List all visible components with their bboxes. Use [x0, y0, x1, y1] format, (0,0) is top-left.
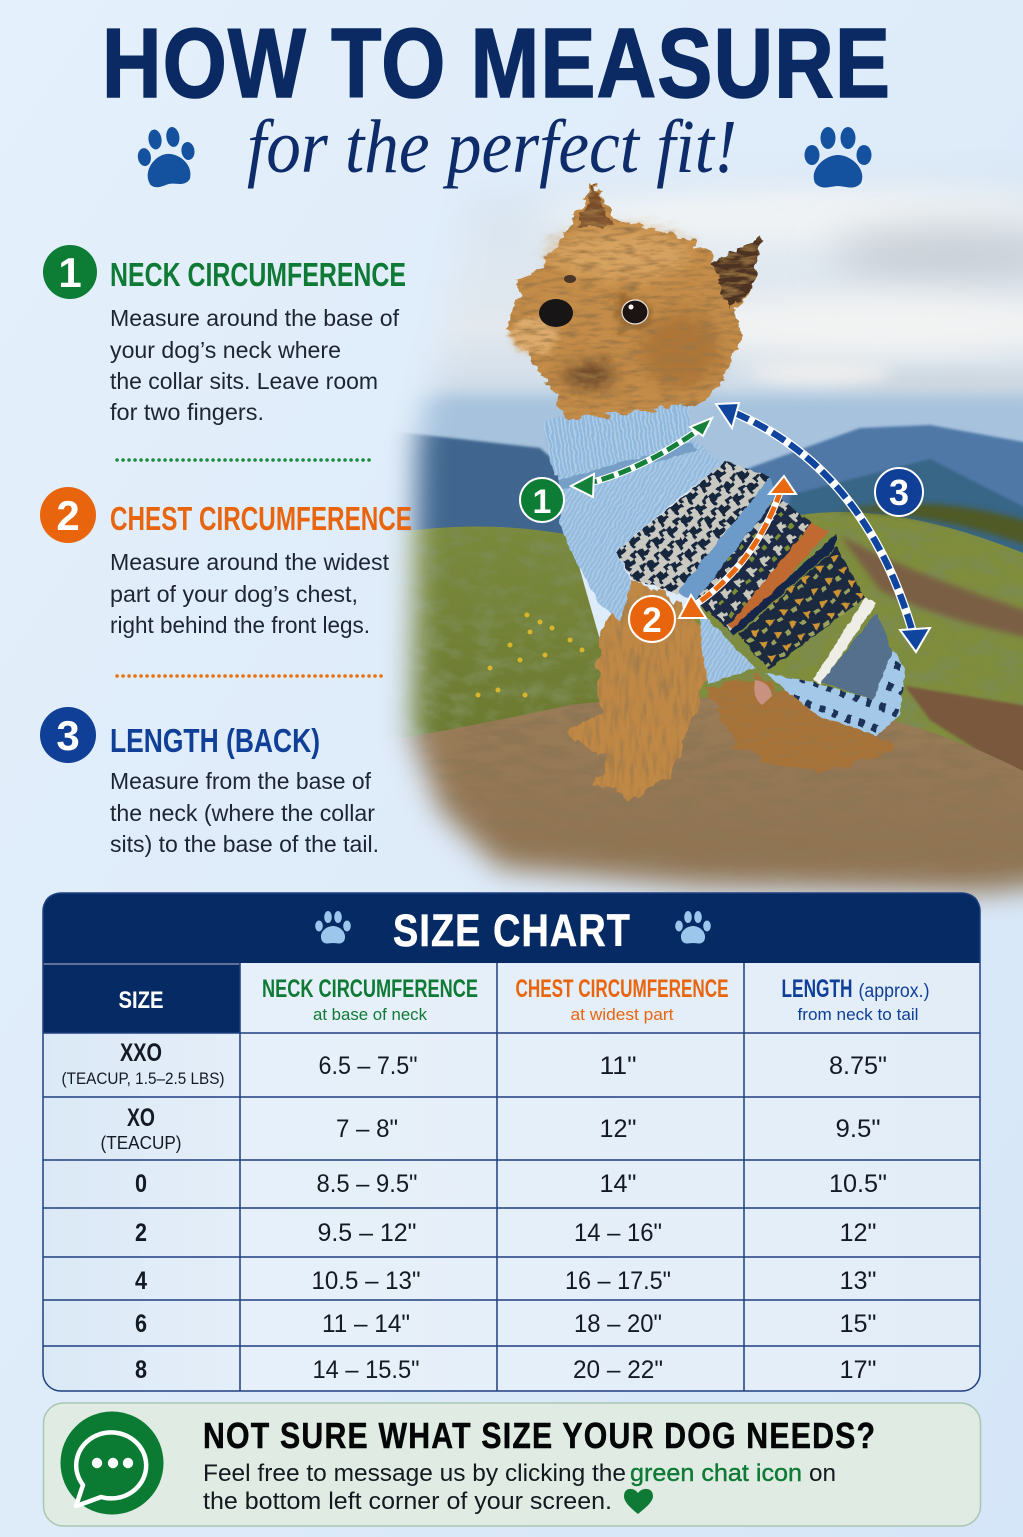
- table values: 17": [840, 1356, 876, 1384]
- dog nose: [539, 299, 573, 327]
- size column: XO: [127, 1104, 155, 1132]
- rear leg and back fur: [706, 677, 898, 771]
- icon: header left paw: [315, 911, 351, 944]
- table values: 13": [840, 1267, 876, 1295]
- heading: chest circumference: CHEST CIRCUMFERENCE: [110, 500, 412, 537]
- table values: 8.5 – 9.5": [316, 1170, 418, 1198]
- table values: 9.5 – 12": [318, 1219, 416, 1247]
- badge 1: [520, 478, 564, 522]
- badge 1: 1: [533, 483, 551, 521]
- column headers: LENGTH: [782, 975, 852, 1003]
- title: HOW TO MEASURE: [102, 9, 890, 119]
- badge 3: 3: [889, 472, 909, 513]
- size column: 0: [135, 1170, 147, 1198]
- table values: 15": [840, 1310, 876, 1338]
- arrow 1: neck: [571, 418, 712, 497]
- icon: number 3: 3: [56, 712, 80, 759]
- panel: chest circumference instructions: [40, 487, 412, 638]
- icon: green chat bubble: [60, 1412, 164, 1514]
- badge 2: [629, 596, 675, 642]
- yellow flowers: [476, 612, 584, 698]
- icon: left paw: [134, 124, 199, 189]
- text: length instructions: the neck (where the collar: [110, 800, 375, 826]
- column headers: CHEST CIRCUMFERENCE: [516, 975, 728, 1003]
- icon: number 2: 2: [56, 492, 80, 539]
- arrow 2: chest: [679, 476, 796, 618]
- size column: 4: [135, 1267, 147, 1295]
- panel: help callout: [44, 1403, 980, 1526]
- size column: SIZE: [118, 987, 164, 1014]
- table values: [312, 1052, 887, 1384]
- column headers: at base of neck: [313, 1005, 427, 1024]
- table values: 14": [600, 1170, 636, 1198]
- text: neck instructions: the collar sits. Leave room: [110, 368, 378, 394]
- sweater pattern body: [615, 461, 905, 736]
- text: neck instructions: your dog’s neck where: [110, 337, 341, 363]
- scenery: [380, 150, 1023, 920]
- badge 3: [875, 468, 923, 516]
- table values: 11 – 14": [322, 1310, 410, 1338]
- table values: 8.75": [829, 1052, 887, 1080]
- badge 2: 2: [642, 601, 662, 640]
- size column: XXO: [120, 1039, 162, 1067]
- text: chest instructions: [110, 549, 390, 638]
- table values: 12": [840, 1219, 876, 1247]
- callout text: [203, 1460, 836, 1515]
- callout heading: NOT SURE WHAT SIZE YOUR DOG NEEDS?: [203, 1417, 875, 1457]
- sweater neck: [559, 435, 720, 621]
- arrow 3: length: [716, 403, 930, 652]
- subtitle: for the perfect fit!: [247, 105, 737, 189]
- size column: (TEACUP): [100, 1133, 182, 1153]
- table values: 7 – 8": [336, 1115, 398, 1143]
- size chart table: [43, 893, 980, 1391]
- table values: 20 – 22": [573, 1356, 663, 1384]
- text: neck instructions: for two fingers.: [110, 399, 264, 425]
- icon: green heart: [624, 1489, 653, 1514]
- icon: right paw: [804, 127, 872, 188]
- heading: length: LENGTH (BACK): [110, 722, 320, 759]
- callout text: green chat icon: [630, 1460, 802, 1487]
- heading: neck circumference: NECK CIRCUMFERENCE: [110, 256, 406, 293]
- table values: 11": [600, 1052, 636, 1080]
- table values: 14 – 15.5": [312, 1356, 420, 1384]
- size column: 2: [135, 1219, 147, 1247]
- icon: number 1: [43, 245, 97, 299]
- table values: 9.5": [836, 1115, 880, 1143]
- panel: neck circumference instructions: [43, 245, 406, 425]
- icon: number 3: [40, 707, 96, 763]
- callout text: the bottom left corner of your screen.: [203, 1488, 612, 1515]
- column headers: at widest part: [570, 1005, 674, 1024]
- front leg: [567, 580, 714, 799]
- sweater sleeve: [700, 612, 756, 684]
- table header: [43, 893, 980, 963]
- dog eye: [622, 300, 648, 324]
- callout text: Feel free to message us by clicking the: [203, 1460, 626, 1487]
- text: neck instructions: [110, 305, 400, 425]
- table values: 12": [600, 1115, 636, 1143]
- text: chest instructions: Measure around the widest: [110, 549, 390, 575]
- column headers: (approx.): [858, 981, 930, 1002]
- icon: header right paw: [675, 911, 711, 944]
- table values: 14 – 16": [574, 1219, 662, 1247]
- table title: SIZE CHART: [393, 905, 630, 956]
- text: length instructions: sits) to the base of the tail.: [110, 831, 379, 857]
- table values: 10.5": [829, 1170, 887, 1198]
- table values: 16 – 17.5": [565, 1267, 671, 1295]
- icon: number 2: [40, 487, 96, 543]
- column headers: NECK CIRCUMFERENCE: [262, 975, 478, 1003]
- text: length instructions: [110, 768, 379, 857]
- panel: length instructions: [40, 707, 379, 857]
- sweater collar: [544, 400, 698, 490]
- head: [505, 182, 762, 420]
- column headers: [262, 975, 930, 1024]
- photo: dog on mountain: [380, 150, 1023, 920]
- size column: 6: [135, 1310, 147, 1338]
- text: length instructions: Measure from the base of: [110, 768, 372, 794]
- callout text: on: [809, 1460, 836, 1487]
- column headers: from neck to tail: [798, 1005, 918, 1024]
- table values: 10.5 – 13": [312, 1267, 420, 1295]
- size column: [43, 963, 240, 1390]
- size column: 8: [135, 1356, 147, 1384]
- dog: [505, 182, 905, 799]
- table values: 6.5 – 7.5": [318, 1052, 418, 1080]
- text: neck instructions: Measure around the base of: [110, 305, 400, 331]
- size column: (TEACUP, 1.5–2.5 LBS): [62, 1069, 224, 1088]
- text: chest instructions: part of your dog’s chest,: [110, 581, 358, 607]
- table values: 18 – 20": [574, 1310, 662, 1338]
- text: chest instructions: right behind the front legs.: [110, 612, 370, 638]
- icon: number 1: 1: [58, 249, 82, 296]
